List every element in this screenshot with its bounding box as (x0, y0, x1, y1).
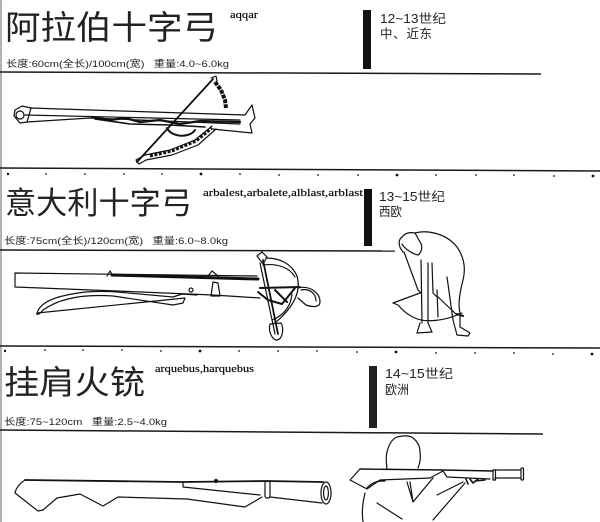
panel: Italian crossbow (4, 186, 470, 340)
latin name: aqqar: aqqar (230, 10, 259, 21)
era and region: Italian crossbow: 13~15世纪 (379, 190, 446, 204)
latin names: arquebus: arquebus,harquebus (155, 364, 254, 375)
era bar (364, 189, 372, 246)
title: arquebus: 挂肩火铳 (4, 364, 145, 401)
era bar (369, 366, 377, 428)
era and region: Arabic crossbow: 12~13世纪 (380, 12, 447, 26)
specs: Arabic crossbow: 长度:60cm(全长)/100cm(宽) 重量:4.0~6.0kg (6, 58, 229, 70)
title: Arabic crossbow: 阿拉伯十字弓 (5, 9, 218, 46)
era and region: arquebus: 14~15世纪 (385, 367, 454, 381)
panel: arquebus (4, 364, 524, 522)
era bar (363, 10, 371, 69)
era and region: Arabic crossbow (380, 12, 447, 41)
specs: arquebus: 长度:75~120cm 重量:2.5~4.0kg (4, 416, 167, 428)
era and region: Arabic crossbow: 中、近东 (380, 26, 432, 41)
era and region: arquebus: 欧洲 (385, 383, 409, 397)
era and region: arquebus (385, 367, 454, 397)
figure: man firing arquebus (350, 436, 524, 522)
drawing: arquebus (15, 480, 331, 511)
drawing: Arabic crossbow (14, 76, 255, 164)
latin names: arbalest: arbalest,arbalete,alblast,arblast (203, 188, 363, 199)
panel: Arabic crossbow (5, 9, 447, 164)
era and region: Italian crossbow: 西欧 (379, 205, 402, 219)
specs: Italian crossbow: 长度:75cm(全长)/120cm(宽) 重量:6.0~8.0kg (4, 235, 228, 247)
title: Italian crossbow: 意大利十字弓 (5, 186, 192, 221)
figure: man spanning crossbow (393, 232, 470, 336)
drawing: Italian crossbow (15, 252, 320, 340)
era and region: Italian crossbow (379, 190, 446, 219)
